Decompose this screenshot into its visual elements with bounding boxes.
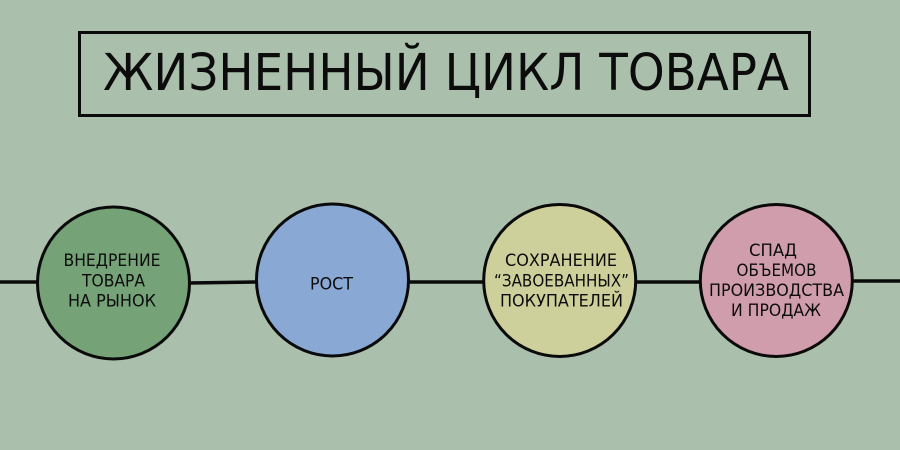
stage 4: decline: ОБЪЕМОВ [736, 261, 816, 281]
stage 2: growth [256, 204, 408, 356]
title box: ЖИЗНЕННЫЙ ЦИКЛ ТОВАРА [103, 42, 789, 103]
stage 1: introduction [38, 207, 190, 359]
stage 1: introduction: ТОВАРА [81, 272, 145, 292]
stage 1: introduction: ВНЕДРЕНИЕ [64, 251, 160, 271]
stage 2: growth: РОСТ [310, 274, 354, 294]
stage 1: introduction: НА РЫНОК [68, 292, 156, 312]
stage 3: retention: “ЗАВОЕВАННЫХ” [494, 272, 629, 292]
stage 4: decline [700, 204, 852, 356]
stage 4: decline: СПАД [749, 241, 797, 261]
stage 3: retention: СОХРАНЕНИЕ [505, 251, 617, 271]
timeline line [0, 281, 900, 283]
stage 4: decline: И ПРОДАЖ [731, 301, 821, 321]
stage 3: retention [484, 204, 636, 356]
stage 4: decline: ПРОИЗВОДСТВА [709, 281, 844, 301]
stage 3: retention: ПОКУПАТЕЛЕЙ [500, 290, 623, 312]
title box [80, 32, 810, 116]
